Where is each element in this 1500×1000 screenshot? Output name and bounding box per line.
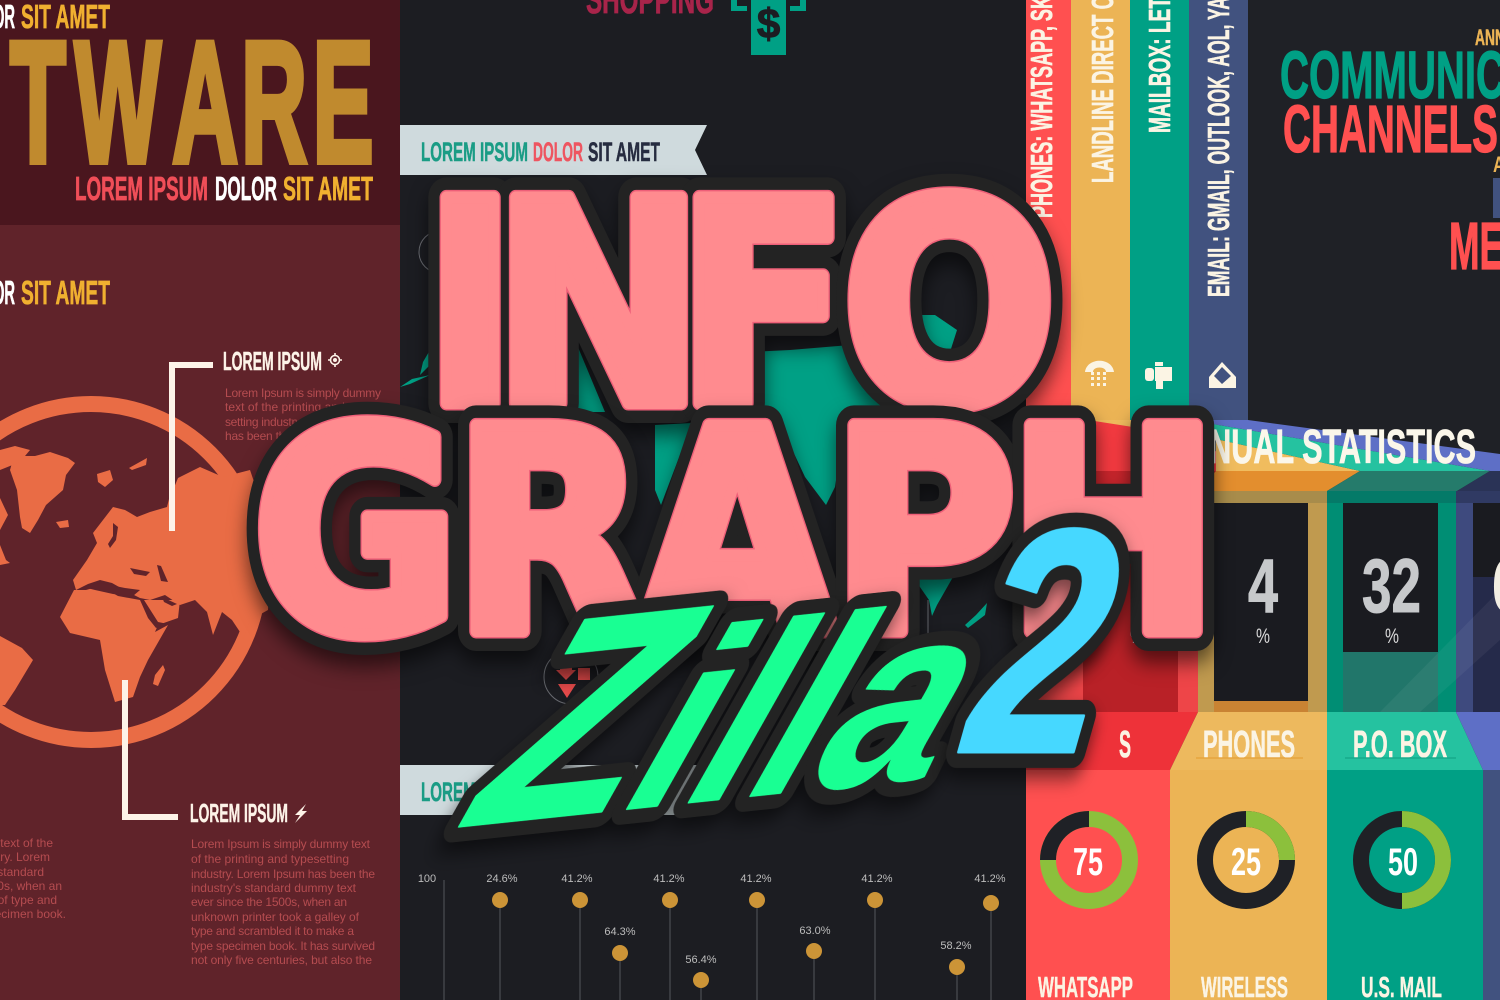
text block: lower right bbox=[191, 837, 375, 967]
section tagline: SIT AMET bbox=[21, 274, 110, 311]
text block: upper callout: Lorem Ipsum is simply dummy bbox=[225, 386, 381, 400]
icon: lightning bolt bbox=[295, 804, 307, 823]
pillar: red stat bbox=[1026, 491, 1198, 712]
subtitle tagline: DOLOR bbox=[215, 170, 277, 207]
chart: lollipop percentages: 64.3% bbox=[604, 926, 636, 938]
icon: money tag bbox=[731, 0, 806, 55]
text block: lower right: ever since the 1500s, when an bbox=[191, 895, 347, 909]
icon: upper left circle bbox=[419, 231, 461, 273]
banner: top ribbon bbox=[400, 125, 707, 175]
heading: software: TWARE bbox=[10, 7, 373, 199]
subtitle tagline: LOREM IPSUM bbox=[75, 170, 208, 207]
column: blue strip bbox=[1483, 770, 1500, 1000]
subtitle tagline: SIT AMET bbox=[283, 170, 373, 207]
column: email bbox=[1189, 0, 1248, 425]
text block: lower left: text of the bbox=[0, 836, 53, 850]
pillar: red stat: % bbox=[1130, 625, 1143, 648]
pillar: phones stat bbox=[1198, 491, 1327, 712]
title: GRAPH: GRAPH bbox=[252, 370, 1220, 698]
chart: teal world map bbox=[400, 315, 987, 628]
pillar: blue stat bbox=[1456, 491, 1500, 712]
text block: lower right: industry's standard dummy text bbox=[191, 881, 357, 895]
panel: centre dark map infographic bbox=[400, 0, 1026, 1000]
banner: top ribbon: SIT AMET bbox=[588, 137, 660, 167]
legend swatch bbox=[1493, 178, 1500, 218]
chart: lollipop percentages bbox=[418, 873, 1006, 1000]
column: us mail gauge bbox=[1327, 770, 1483, 1000]
text block: lower right: type and scrambled it to make a bbox=[191, 924, 354, 938]
title: Zilla script: Zilla bbox=[432, 511, 1039, 890]
icon: telephone bbox=[1085, 361, 1114, 386]
chart: lollipop percentages: 41.2% bbox=[653, 873, 685, 885]
chart: lollipop percentages: 100 bbox=[418, 873, 436, 885]
chart: globe ring with continents bbox=[0, 404, 270, 740]
roof: perspective ribbons bbox=[1026, 420, 1500, 491]
icon: crosshair bbox=[328, 353, 342, 367]
title: GRAPH: GRAPH bbox=[252, 370, 1220, 698]
banner: lower ribbon: LOREM IPSUM bbox=[421, 777, 528, 807]
label row: phones: PHONES bbox=[1203, 724, 1295, 766]
column: landline bbox=[1071, 0, 1130, 425]
text block: lower right: not only five centuries, but also the bbox=[191, 953, 372, 967]
pillar: po box stat: % bbox=[1385, 625, 1399, 648]
title: INFO: INFO bbox=[423, 142, 1057, 470]
title: GRAPH: GRAPH bbox=[252, 370, 1220, 698]
label row: blue bbox=[1456, 712, 1500, 770]
chart: lollipop percentages: 41.2% bbox=[861, 873, 893, 885]
text block: lower right: industry. Lorem Ipsum has been the bbox=[191, 867, 375, 881]
icon: mailbox bbox=[1145, 362, 1172, 389]
pillar: phones stat: % bbox=[1256, 625, 1270, 648]
chart: lollipop percentages: 58.2% bbox=[940, 940, 972, 952]
column: whatsapp gauge: 75 bbox=[1073, 841, 1103, 884]
title: Zilla script: Zilla bbox=[432, 511, 1039, 890]
title: numeral 2: 2 bbox=[949, 463, 1136, 821]
text block: lower right: unknown printer took a galley of bbox=[191, 910, 360, 924]
text block: upper callout bbox=[225, 386, 381, 443]
column: wireless gauge: 25 bbox=[1231, 841, 1261, 884]
icon: lower left circle with arrows bbox=[544, 650, 598, 704]
text block: lower right: Lorem Ipsum is simply dummy text bbox=[191, 837, 371, 851]
text block: upper callout: has been the industry bbox=[225, 429, 335, 443]
heading: upper callout: LOREM IPSUM bbox=[223, 346, 322, 376]
chart: lollipop percentages: 41.2% bbox=[740, 873, 772, 885]
text block: lower right: type specimen book. It has survived bbox=[191, 939, 375, 953]
pillar: po box stat: 32 bbox=[1362, 544, 1421, 629]
inland seas on the globe bbox=[83, 523, 177, 628]
label row: phones bbox=[1170, 712, 1327, 770]
panel: left maroon software infographic bbox=[0, 0, 400, 1000]
chart: lollipop percentages: 41.2% bbox=[561, 873, 593, 885]
icon: lower right circle bbox=[901, 651, 955, 705]
text block: lower left bbox=[0, 836, 66, 921]
banner: lower ribbon bbox=[400, 765, 707, 815]
icon: money tag: $ bbox=[757, 0, 780, 47]
title: numeral 2: 2 bbox=[949, 463, 1136, 821]
panel: right communication channels bbox=[1024, 0, 1500, 1000]
title: INFO: INFO bbox=[423, 142, 1057, 470]
label row: red bbox=[1026, 712, 1198, 770]
chart: lollipop percentages: 24.6% bbox=[486, 873, 518, 885]
leader line: lower callout bbox=[125, 680, 178, 817]
chart: lollipop percentages: 41.2% bbox=[974, 873, 1006, 885]
light diagonal overlay bbox=[1380, 590, 1500, 712]
pillar: po box stat bbox=[1327, 491, 1456, 712]
label row: red: S bbox=[1119, 724, 1131, 766]
banner: top ribbon: DOLOR bbox=[533, 137, 583, 167]
text block: lower right: of the printing and typesetting bbox=[191, 852, 349, 866]
label row: po box bbox=[1327, 712, 1483, 770]
map pin line bbox=[927, 600, 929, 652]
text block: upper callout: text of the printing and type bbox=[225, 400, 371, 414]
column: phones bbox=[1024, 0, 1071, 425]
chart: lollipop percentages: 63.0% bbox=[799, 925, 831, 937]
pillar: phones stat: 4 bbox=[1248, 544, 1278, 629]
heading: lower callout: LOREM IPSUM bbox=[190, 798, 288, 828]
banner: top ribbon: LOREM IPSUM bbox=[421, 137, 528, 167]
title: INFO: INFO bbox=[423, 142, 1057, 470]
column: whatsapp gauge bbox=[1026, 770, 1170, 1000]
column: us mail gauge: 50 bbox=[1388, 841, 1418, 884]
chart: lollipop percentages: 56.4% bbox=[685, 954, 717, 966]
column: mailbox bbox=[1130, 0, 1189, 425]
column: wireless gauge bbox=[1170, 770, 1327, 1000]
leader line: upper callout bbox=[172, 365, 213, 531]
text block: upper callout: setting industry. Lorem Ipsum bbox=[225, 415, 373, 429]
icon: open envelope bbox=[1209, 362, 1236, 388]
